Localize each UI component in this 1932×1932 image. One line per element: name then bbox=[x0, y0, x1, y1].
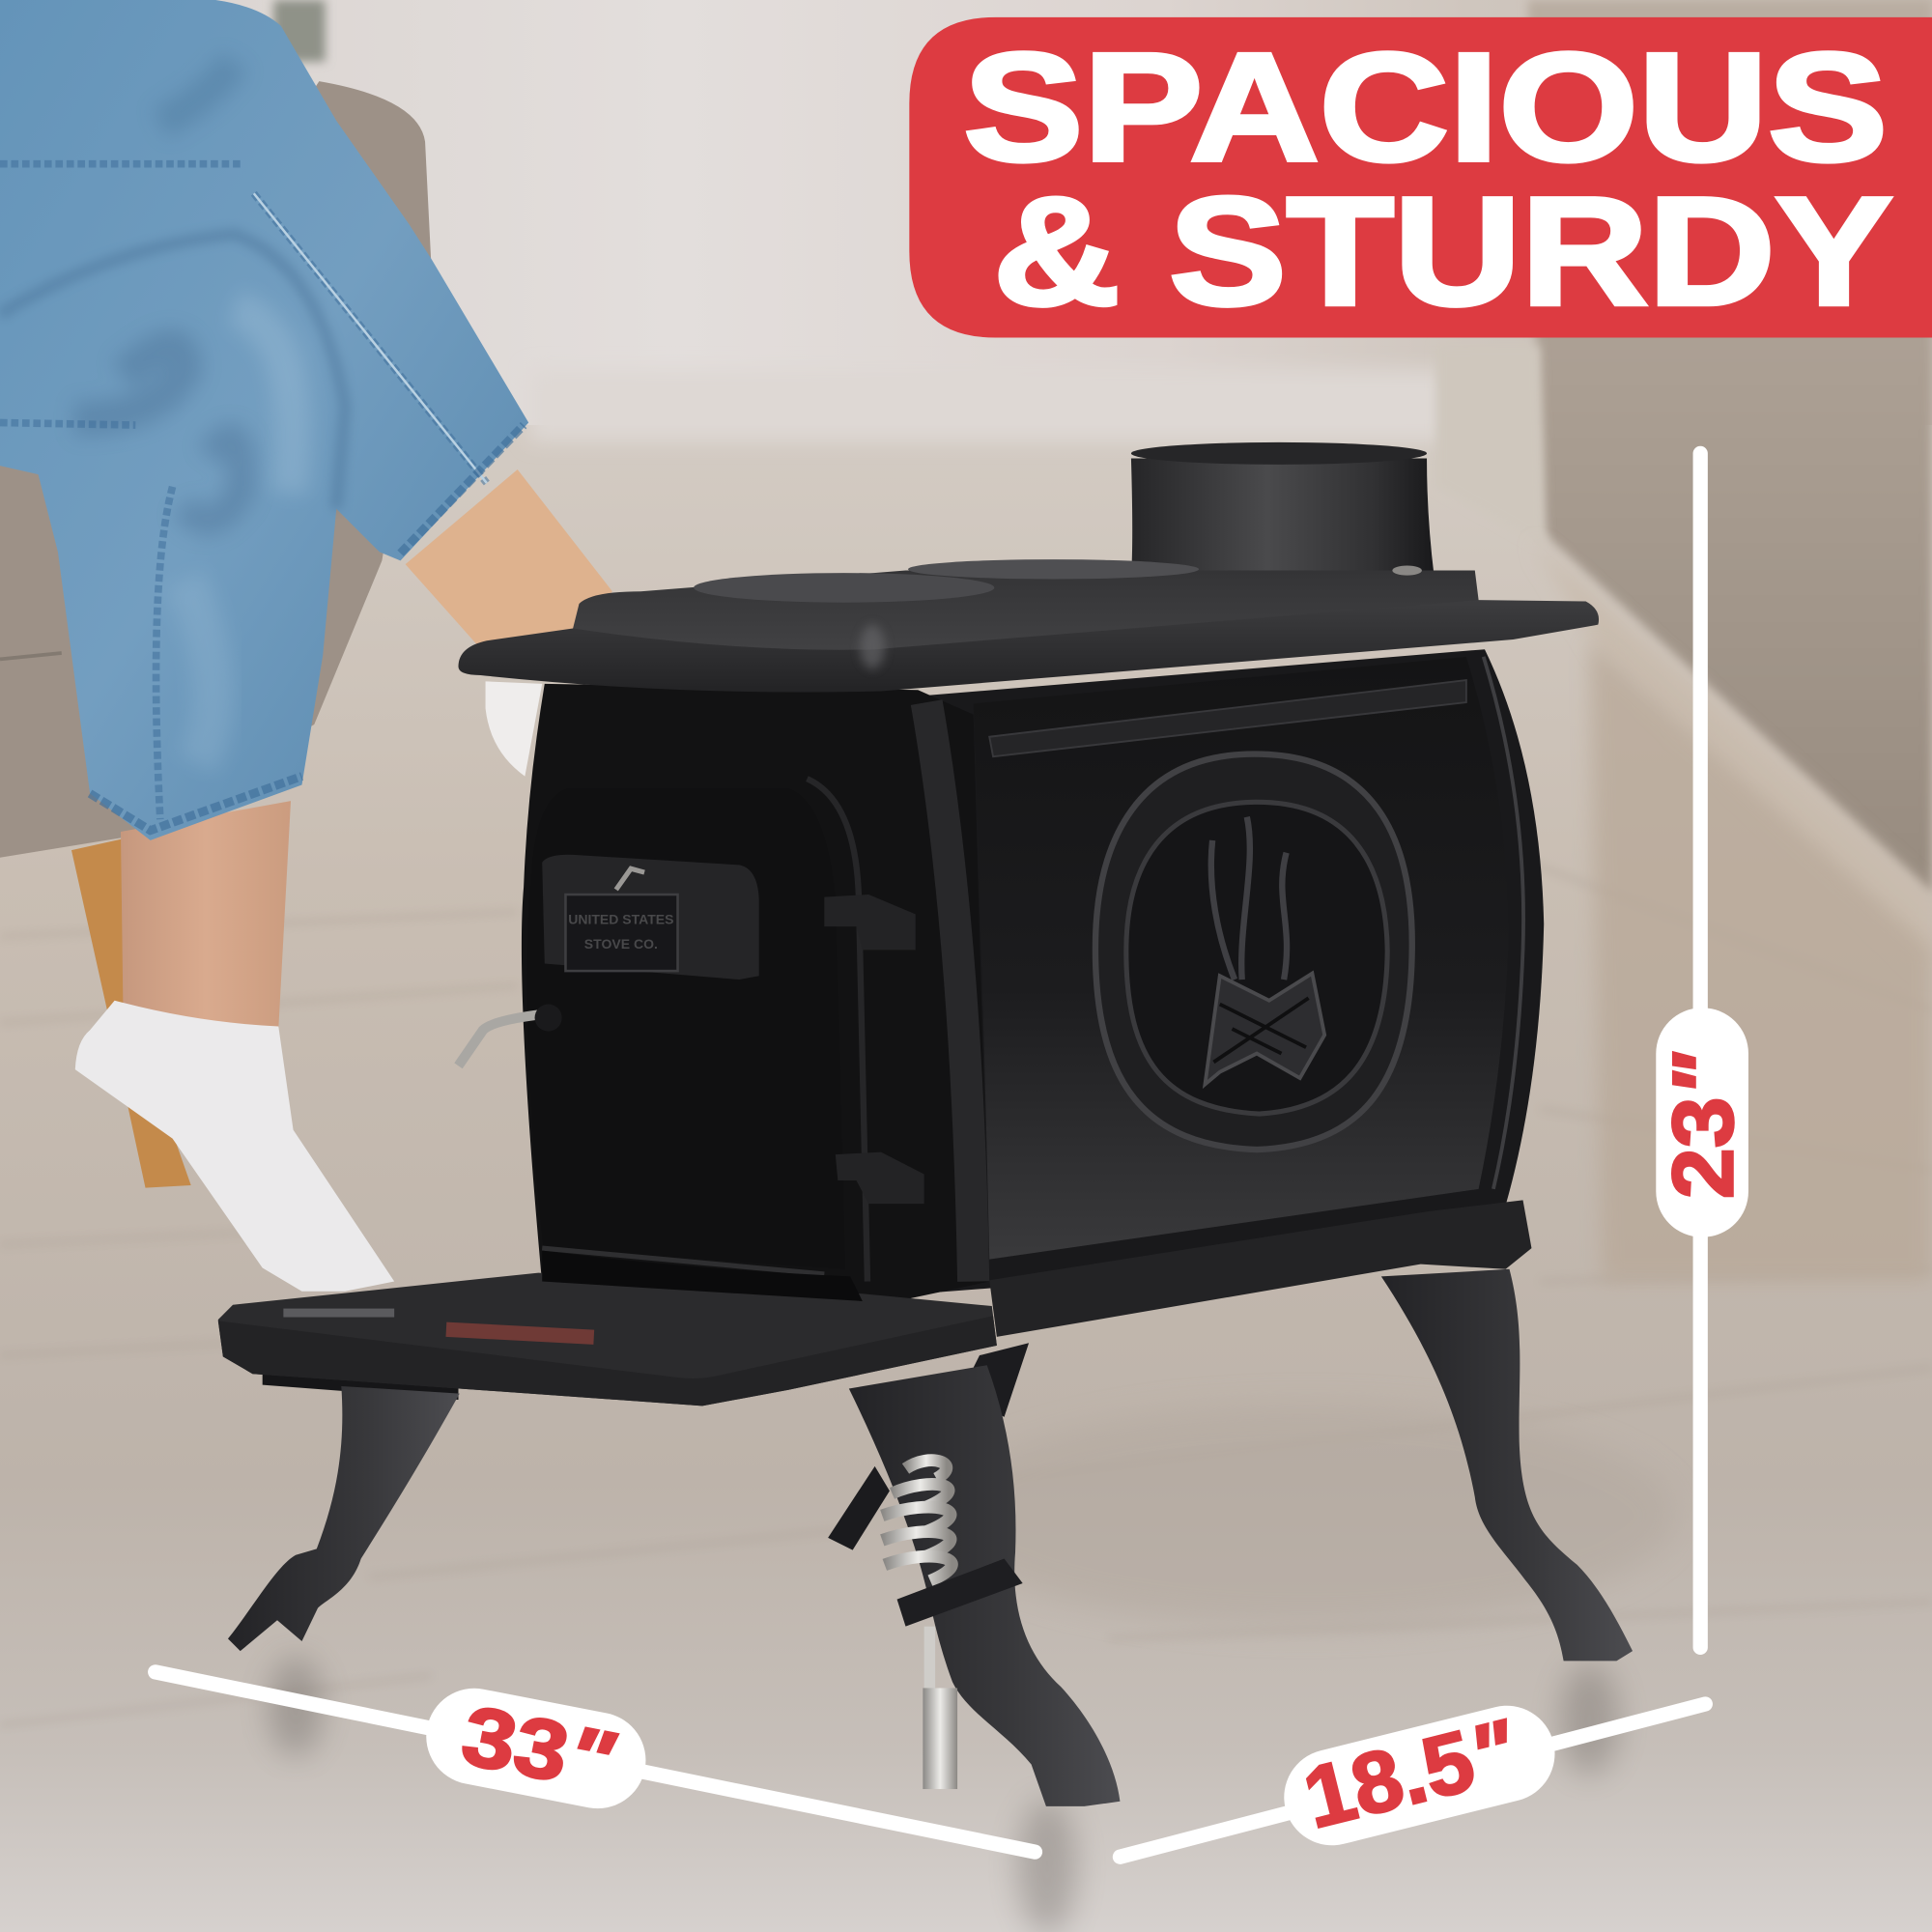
shelf: warning label bbox=[446, 1322, 594, 1345]
stove: rear left leg bbox=[961, 1343, 1029, 1417]
stove: flue collar bbox=[1131, 442, 1435, 577]
stove: left front leg bbox=[228, 1386, 460, 1651]
top plate: bolt bbox=[1392, 565, 1422, 576]
jeans: seams bbox=[0, 164, 487, 819]
stove: right rear leg bbox=[1381, 1269, 1633, 1661]
stove: center front leg bbox=[849, 1365, 1120, 1806]
chair bbox=[0, 81, 431, 1188]
latch hook bbox=[616, 868, 644, 890]
stove: door latch plate: STOVE CO. bbox=[584, 936, 658, 952]
stove: top plate bbox=[458, 559, 1599, 693]
stove: hearth shelf bbox=[218, 1251, 997, 1406]
person: near leg and sock bbox=[75, 801, 394, 1292]
person: far leg and sock behind stove bbox=[406, 469, 612, 777]
jeans: cuffs bbox=[90, 425, 524, 831]
title: second line: & STURDY bbox=[993, 165, 1892, 337]
chair: wooden leg bbox=[71, 838, 191, 1188]
dimension: width 33 inches bbox=[156, 1672, 1035, 1852]
stove: upper panel ledge bbox=[989, 680, 1466, 756]
stove: door latch plate: UNITED STATES bbox=[568, 912, 673, 927]
person: jeans bbox=[0, 0, 528, 840]
dimension: height 23 inches bbox=[1654, 446, 1750, 1655]
stove: rear shadow leg bracket bbox=[828, 1466, 890, 1550]
title banner bbox=[909, 17, 1932, 337]
dimension: width 33 inches: 33" bbox=[455, 1688, 621, 1809]
stove: door bbox=[458, 779, 924, 1282]
stove: corner frame bbox=[926, 702, 974, 1282]
background: right wall and baseboard bbox=[1435, 0, 1932, 1282]
stove: door latch plate bbox=[542, 855, 759, 980]
stove bbox=[218, 442, 1633, 1806]
stove floor shadows and reflections bbox=[269, 1658, 1619, 1932]
dimension: height 23 inches: 23" bbox=[1654, 1052, 1750, 1199]
stove: hinges bbox=[824, 895, 916, 950]
stove: side panel bbox=[918, 649, 1544, 1293]
title: first line: SPACIOUS bbox=[963, 21, 1888, 193]
stove: base rail and bracket bbox=[989, 1200, 1531, 1337]
emblem: flames bbox=[1211, 817, 1287, 980]
stove: door handle bbox=[458, 1014, 545, 1065]
dimension: depth 18.5 inches bbox=[1120, 1695, 1705, 1857]
dimension: depth 18.5 inches: 18.5" bbox=[1294, 1701, 1525, 1846]
stove: underside of left shelf bbox=[263, 1365, 458, 1400]
stove: front body bbox=[522, 684, 989, 1309]
background: room wall bbox=[0, 0, 1932, 518]
body base ring bbox=[542, 1251, 863, 1301]
emblem: logs bbox=[1205, 974, 1324, 1084]
stove: spring handle bbox=[882, 1461, 1023, 1789]
top plate: corner highlight bbox=[860, 625, 885, 669]
background: window frame behind jeans bbox=[273, 0, 326, 62]
stove: oval log and flame emblem bbox=[1095, 754, 1412, 1150]
